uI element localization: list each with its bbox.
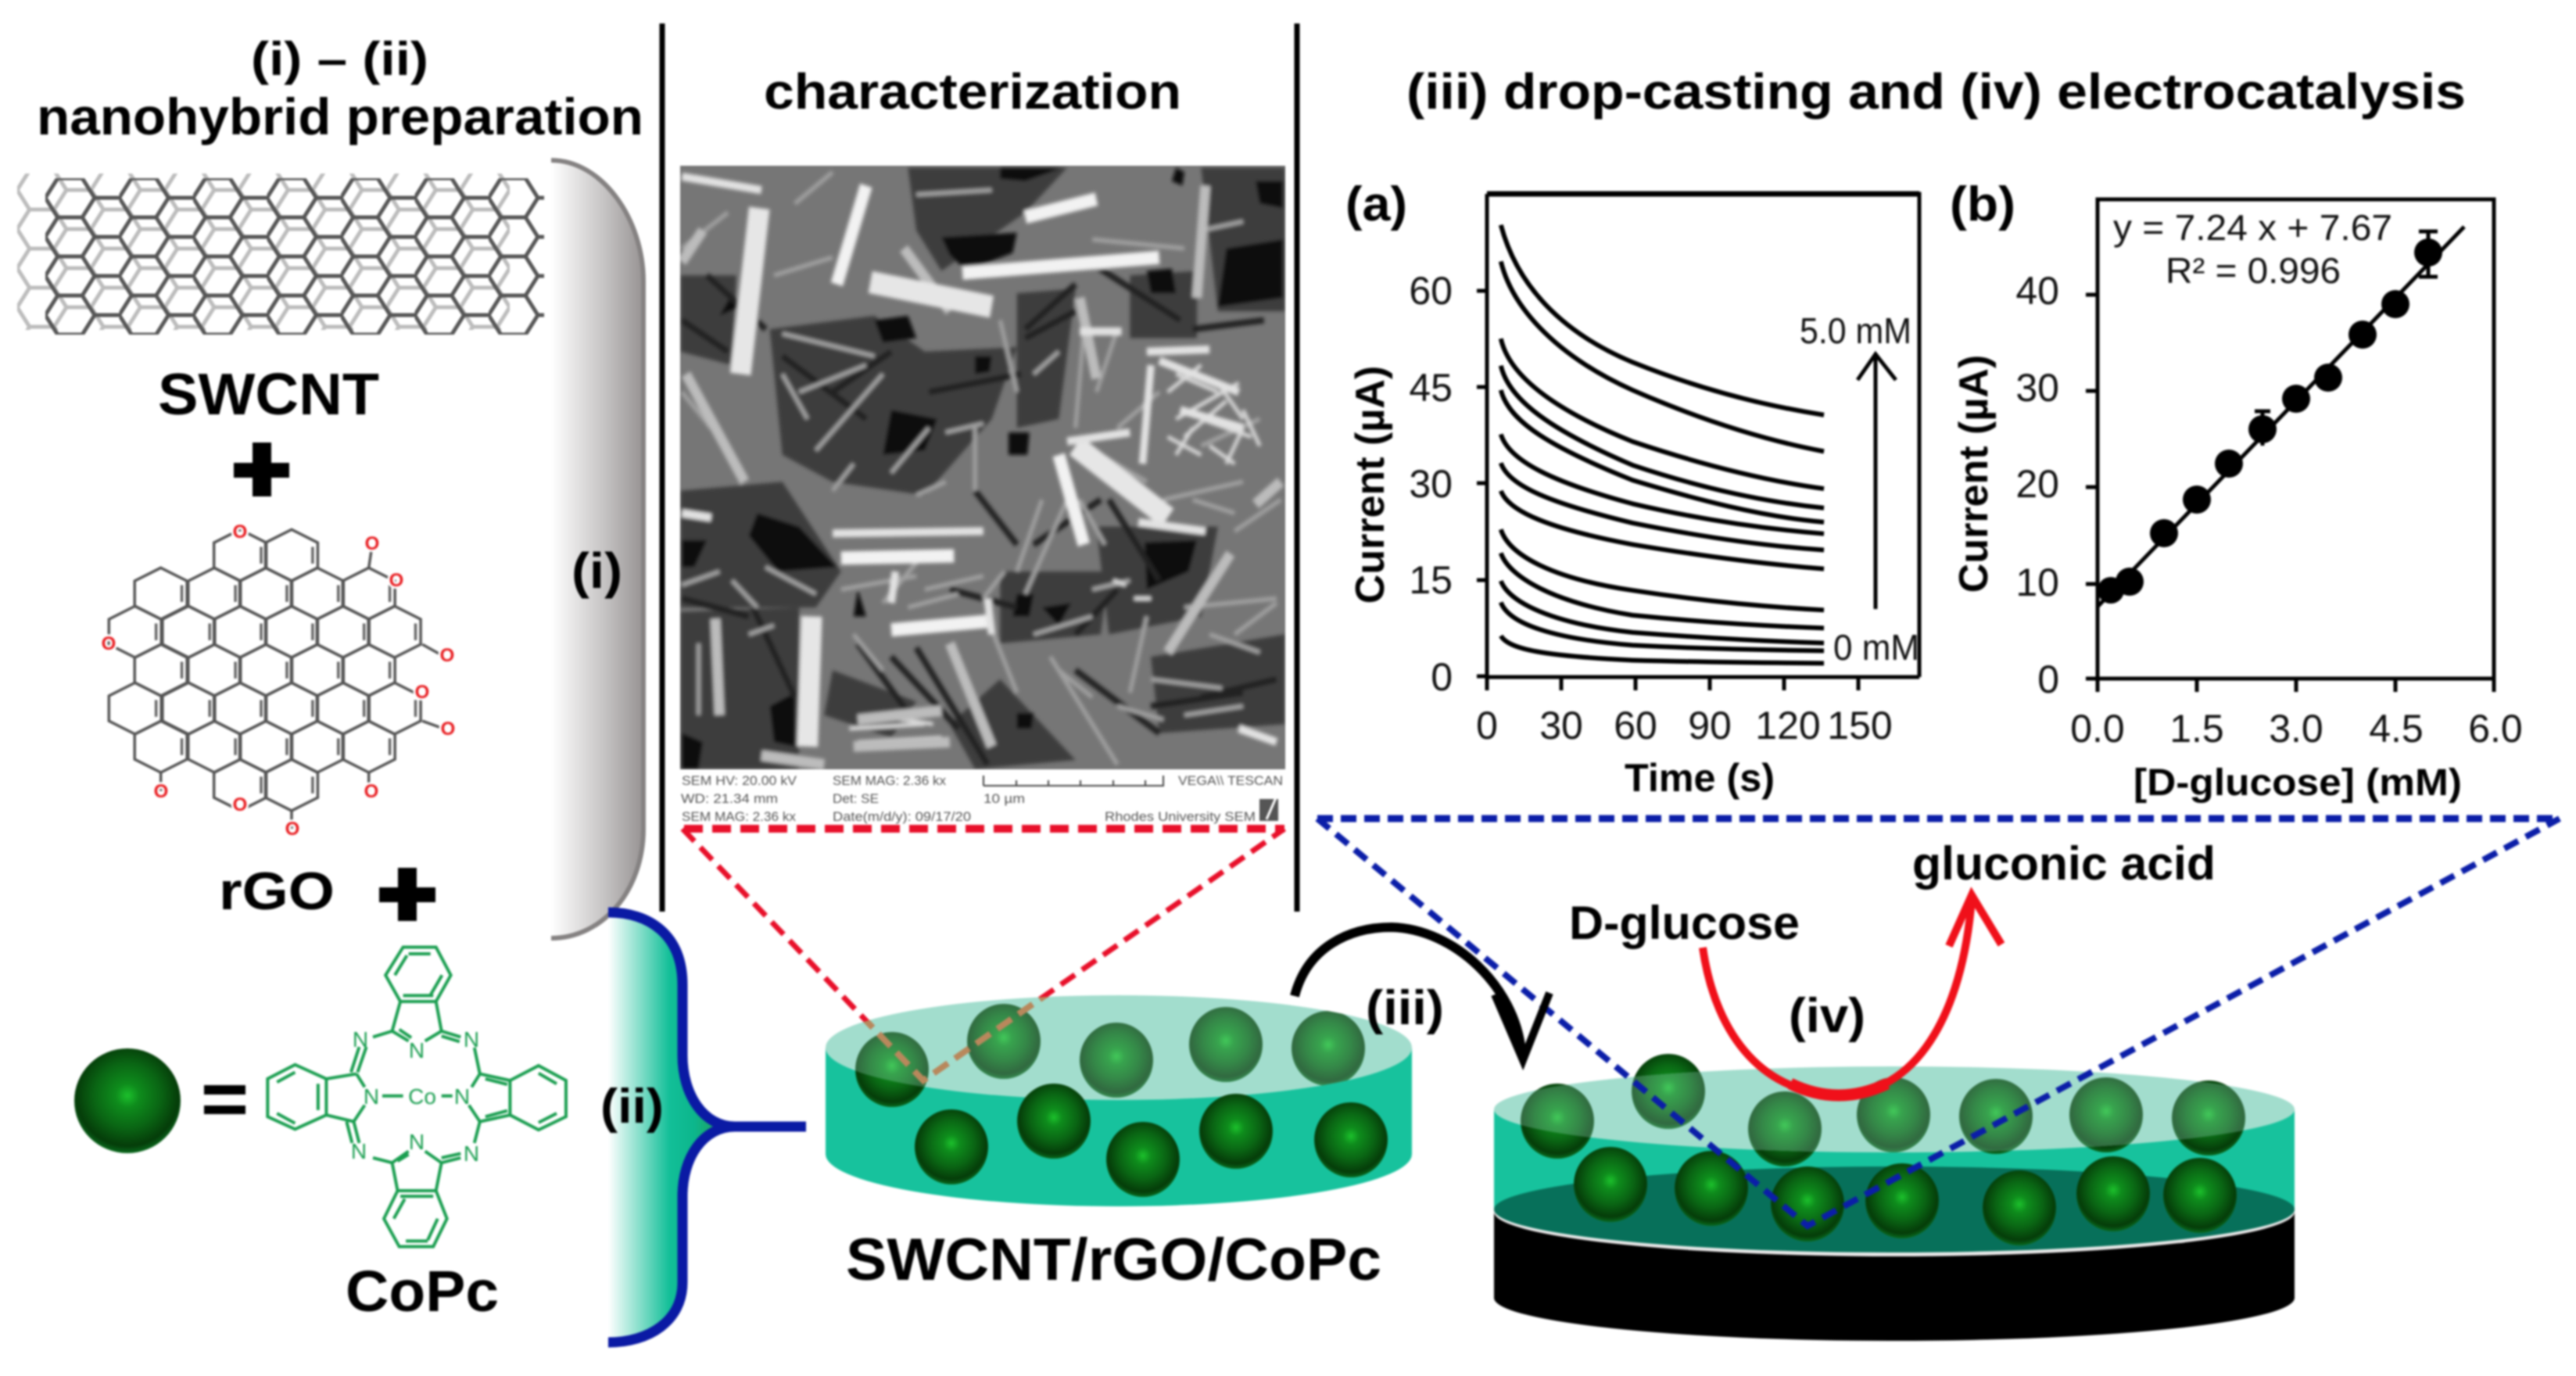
icon: CoPc molecule: N	[353, 1027, 368, 1052]
icon: equals sign	[204, 1085, 245, 1114]
chart (a): chronoamperometry: 60	[1614, 704, 1657, 747]
icon: plus sign	[234, 443, 289, 496]
SEM caption strip: Date(m/d/y): 09/17/20	[833, 809, 971, 824]
icon: rGO molecule: O	[415, 682, 429, 703]
icon: rGO molecule: O	[441, 718, 455, 740]
label: gluconic acid: gluconic acid	[1912, 837, 2216, 890]
darker background zones	[681, 167, 1285, 769]
icon: CoPc molecule: Co	[408, 1084, 436, 1109]
chart (b): calibration plot: 6.0	[2468, 707, 2523, 751]
arrow: red dashed zoom lines to SEM	[683, 829, 1284, 1080]
chart (b): calibration plot: 40	[2015, 269, 2059, 313]
chart (a): chronoamperometry: 30	[1539, 704, 1583, 747]
heading: drop-casting and electrocatalysis: (iii) drop-casting and (iv) electrocatalysis	[1406, 63, 2466, 120]
chart (b): calibration plot: Current (µA)	[1951, 355, 1997, 593]
SEM caption strip: 10 µm	[983, 791, 1025, 806]
chart (b): calibration plot: 0	[2037, 658, 2059, 701]
icon: CoPc molecule: N	[364, 1084, 379, 1109]
icon: rGO molecule: O	[154, 781, 168, 802]
SEM caption strip: WD: 21.34 mm	[681, 791, 778, 806]
SEM caption strip: VEGA\\ TESCAN	[1178, 773, 1283, 788]
label: (ii): (ii)	[600, 1080, 664, 1134]
SEM micrograph	[680, 166, 1285, 769]
icon: CoPc molecule: N	[464, 1141, 479, 1166]
bracket: step (ii)	[608, 912, 806, 1342]
chart (a): chronoamperometry: Current (µA)	[1348, 366, 1393, 604]
label: rGO: rGO	[219, 862, 335, 921]
heading: nanohybrid preparation: nanohybrid preparation	[37, 88, 643, 145]
chart (b): calibration plot: 3.0	[2269, 707, 2323, 751]
SEM caption strip: SEM MAG: 2.36 kx	[682, 809, 796, 824]
heading: characterization: characterization	[764, 63, 1181, 120]
chart (a): chronoamperometry: Time (s)	[1625, 756, 1775, 800]
chart (a): chronoamperometry	[1345, 177, 1919, 800]
chart (b): calibration plot: 20	[2015, 462, 2059, 506]
current decay curves	[1501, 225, 1824, 663]
chart (a): chronoamperometry: 30	[1409, 462, 1453, 506]
icon: rGO molecule: O	[364, 781, 378, 802]
medium grey rods	[682, 185, 1281, 765]
icon: rGO molecule: O	[440, 645, 454, 666]
icon: CoPc sphere	[74, 1048, 181, 1153]
icon: rGO molecule: O	[233, 794, 247, 815]
chart (a): chronoamperometry: (a)	[1345, 177, 1407, 231]
chart (a): chronoamperometry: 5.0 mM	[1800, 310, 1911, 351]
icon: rGO molecule	[102, 521, 455, 840]
chart (b): calibration plot: R² = 0.996	[2166, 250, 2341, 291]
chart (b): calibration plot: 30	[2015, 366, 2059, 410]
label: SWCNT: SWCNT	[158, 361, 379, 427]
section divider lines	[662, 23, 1297, 912]
chart (b): calibration plot: 1.5	[2169, 707, 2224, 751]
icon: rGO molecule: O	[365, 533, 379, 554]
SEM caption strip	[681, 773, 1283, 824]
chart (b): calibration plot	[1950, 177, 2523, 804]
icon: CoPc molecule: N	[409, 1130, 425, 1154]
bright cluster	[849, 365, 1259, 742]
arrow: blue dashed zoom lines to charts	[1317, 819, 2560, 1226]
label: D-glucose: D-glucose	[1569, 897, 1800, 949]
chart (a): chronoamperometry: 150	[1827, 704, 1893, 747]
icon: CoPc molecule: N	[454, 1084, 470, 1109]
icon: plus sign	[379, 868, 435, 921]
fine dark rods	[682, 267, 1277, 765]
arrow: step (iii)	[1295, 927, 1550, 1060]
SEM caption strip: Det: SE	[833, 791, 879, 806]
label: (i): (i)	[571, 543, 622, 599]
chart (a): chronoamperometry: 15	[1409, 558, 1453, 602]
chart (b): calibration plot: y = 7.24 x + 7.67	[2113, 207, 2392, 248]
chart (a): chronoamperometry: 90	[1688, 704, 1732, 747]
icon: CoPc molecule: N	[351, 1139, 367, 1163]
panel: electrode with drop-cast film	[1494, 1054, 2295, 1341]
heading: nanohybrid preparation	[37, 33, 643, 145]
label: (iii): (iii)	[1366, 981, 1444, 1035]
icon: rGO molecule: O	[285, 819, 299, 840]
chart (b): calibration plot: (b)	[1950, 177, 2015, 231]
chart (a): chronoamperometry: 120	[1755, 704, 1821, 747]
bracket: step (i)	[551, 160, 643, 938]
icon: CoPc molecule: N	[409, 1038, 425, 1062]
fit line and data points	[2098, 227, 2464, 607]
heading: nanohybrid preparation: (i) – (ii)	[251, 33, 428, 85]
chart (a): chronoamperometry: 0 mM	[1833, 627, 1919, 668]
chart (a): chronoamperometry: 0	[1476, 704, 1498, 747]
label: CoPc: CoPc	[346, 1259, 499, 1324]
chart (b): calibration plot: 4.5	[2369, 707, 2424, 751]
icon: CoPc molecule	[267, 948, 566, 1247]
SEM caption strip: SEM HV: 20.00 kV	[682, 773, 797, 788]
label: (iv): (iv)	[1789, 989, 1865, 1043]
SEM caption strip: SEM MAG: 2.36 kx	[833, 773, 946, 788]
icon: SWCNT nanotube	[17, 174, 544, 335]
icon: rGO molecule: O	[102, 633, 116, 654]
chart (b): calibration plot: 0.0	[2070, 707, 2125, 751]
black cavities	[682, 167, 1283, 769]
icon: CoPc molecule: N	[464, 1027, 479, 1052]
icon: rGO molecule: O	[389, 570, 403, 591]
chart (a): chronoamperometry: 45	[1409, 366, 1453, 410]
bright rods	[740, 208, 1168, 747]
chart (b): calibration plot: 10	[2015, 561, 2059, 604]
SEM caption strip: Rhodes University SEM	[1105, 809, 1256, 824]
icon: rGO molecule: O	[233, 521, 247, 543]
label: SWCNT/rGO/CoPc: SWCNT/rGO/CoPc	[846, 1227, 1381, 1293]
panel: film disc with nanohybrid spheres	[826, 995, 1412, 1206]
arrow: glucose oxidation	[1703, 895, 2001, 1095]
chart (a): chronoamperometry: 60	[1409, 269, 1453, 313]
fine grey rods	[682, 172, 1281, 765]
chart (a): chronoamperometry: 0	[1431, 655, 1453, 699]
chart (b): calibration plot: [D-glucose] (mM)	[2134, 762, 2462, 804]
